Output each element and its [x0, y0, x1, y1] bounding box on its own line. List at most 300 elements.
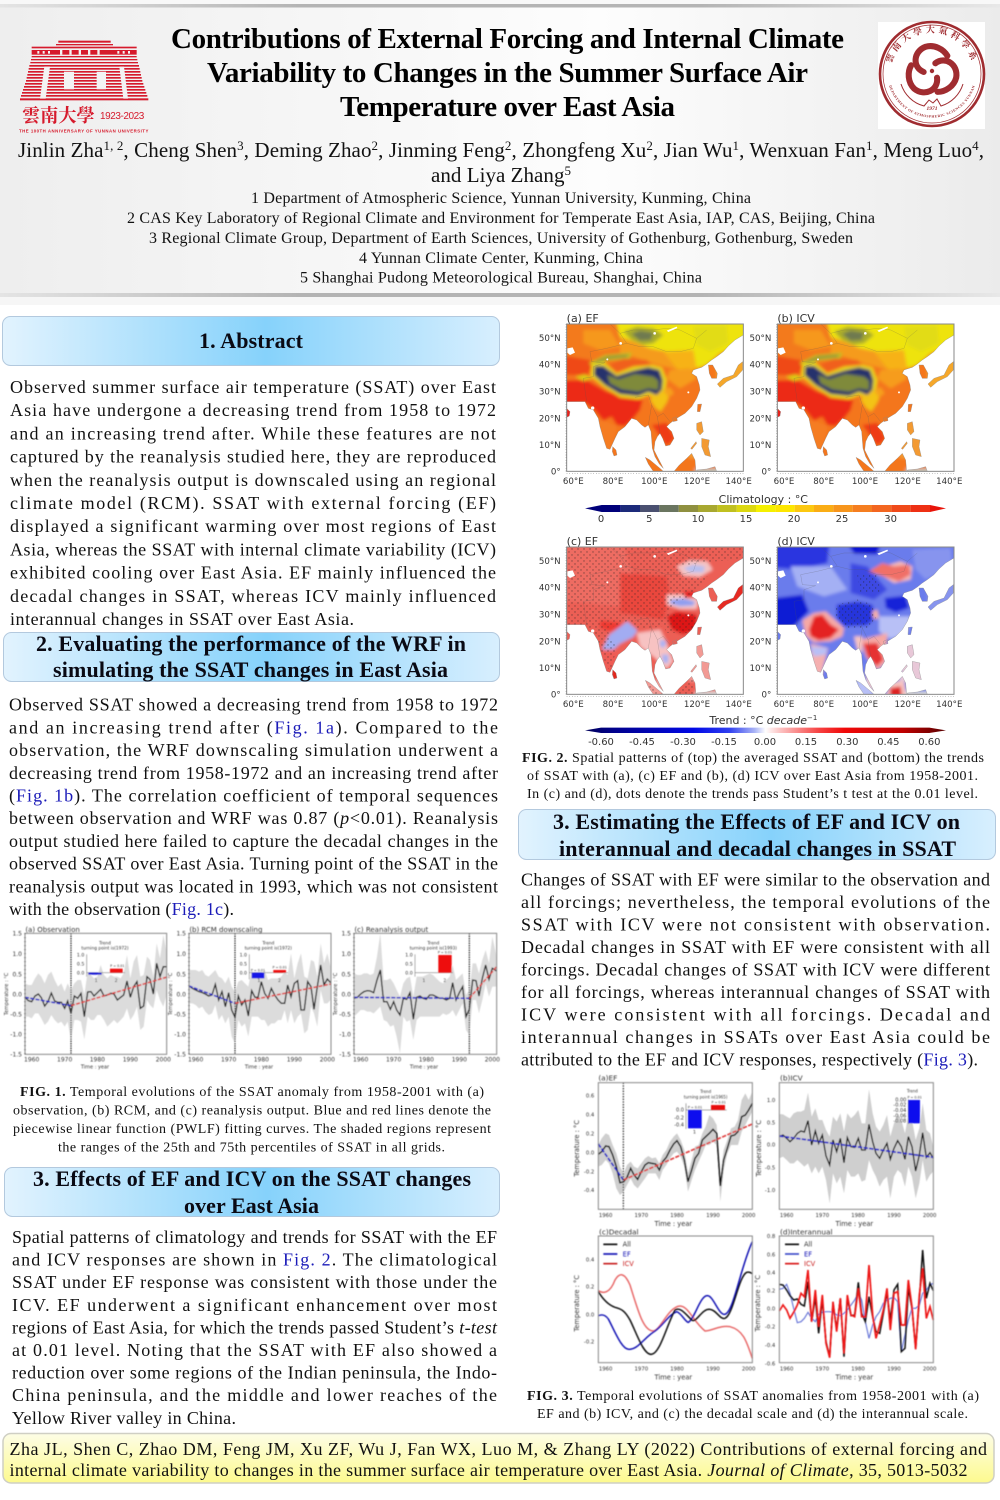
chart: panel (b) RCM downscaling: 2000 — [320, 1057, 335, 1064]
logo: Department of Atmospheric Sciences seal: 雲南大學大氣科學系 — [886, 24, 978, 62]
abstract text: captured by the reanalysis studied here, they are reproduced — [10, 447, 496, 467]
logo: Yunnan University centenary: 1923-2023 — [100, 111, 145, 122]
section 3 right text: SSAT with ICV were not consistent with observation. — [521, 915, 990, 935]
panel: section 3 heading (right): interannual and decadal changes in SSAT — [559, 836, 956, 861]
chart: panel (c) Reanalysis output: Time : year — [409, 1065, 439, 1071]
figure 3 caption — [527, 1389, 979, 1422]
legend: interannual: All — [804, 1241, 812, 1249]
header background — [0, 0, 1000, 305]
section 3 left text: reduction over some regions of the Indian peninsula, the Indo- — [12, 1363, 497, 1383]
inset: trend bars EF: P = 0.01 — [712, 1100, 726, 1104]
logo: Yunnan University centenary — [19, 41, 148, 134]
affiliations: 1 Department of Atmospheric Science, Yunnan University, Kunming, China — [251, 190, 751, 207]
affiliations: 5 Shanghai Pudong Meteorological Bureau, Shanghai, China — [300, 270, 702, 286]
chart: panel (b) RCM downscaling: 1980 — [254, 1057, 269, 1064]
section 3 right text: all forcings; nevertheless, the temporal evolutions of the — [521, 892, 990, 912]
chart: panel (a) EF: 0.6 — [586, 1093, 595, 1099]
colorbar: trend: 0.00 — [754, 737, 776, 748]
authors: 2 — [505, 138, 511, 153]
inset: trend bars (c): P = 0.01 — [438, 951, 452, 955]
panel: section 2 heading: 2. Evaluating the performance of the WRF in — [36, 631, 466, 656]
figure 1 caption: observation, (b) RCM, and (c) reanalysis output. Blue and red lines denote the — [13, 1104, 491, 1118]
colorbar: climatology: 30 — [884, 514, 897, 525]
abstract text: Asia, whereas the SSAT with internal climate variability (ICV) — [10, 539, 496, 560]
chart: panel (d) Interannual: 0.2 — [767, 1289, 775, 1295]
map: (a) EF climatology: (a) EF — [567, 312, 599, 325]
chart: panel (a) EF: 0.0 — [586, 1151, 595, 1157]
inset: trend bars (a): turning point is(1972) — [81, 946, 129, 952]
figure 2: climatology maps — [539, 310, 971, 525]
chart: panel (a) EF: 0.4 — [586, 1113, 595, 1119]
chart: panel (d) Interannual: Time : year — [835, 1374, 873, 1382]
colorbar: trend — [585, 714, 946, 748]
chart: panel (b) RCM downscaling: (b) RCM downscaling — [189, 926, 262, 934]
chart: panel (d) Interannual: 0.6 — [767, 1252, 776, 1258]
chart: panel (c) Decadal: 0.0 — [586, 1312, 595, 1318]
chart: panel (a) EF: 2000 — [742, 1213, 756, 1219]
chart: panel (a) EF: 1970 — [635, 1213, 649, 1219]
inset: trend bars (a) — [77, 940, 129, 984]
chart: panel (b) RCM downscaling: -1.5 — [174, 1052, 186, 1059]
colorbar: trend: 0.45 — [877, 737, 899, 748]
logo: Yunnan University centenary: 雲南大學 — [22, 102, 95, 128]
colorbar: trend: −1 — [807, 714, 817, 722]
figure 1: three time series panels — [4, 926, 500, 1071]
inset: trend bars (b): Trend — [261, 940, 274, 946]
chart: panel (c) Decadal: 0.2 — [586, 1285, 594, 1291]
affiliations: 4 Yunnan Climate Center, Kunming, China — [359, 250, 643, 267]
chart: panel (a) EF: 1990 — [706, 1213, 720, 1219]
section 3 left text: at 0.01 level. Noting that the SSAT with EF also showed a — [12, 1340, 497, 1360]
section 3 left text — [12, 1227, 498, 1428]
chart: panel (a) EF: 0.2 — [586, 1131, 594, 1137]
section 3 right text: forcings. Decadal changes of SSAT with ICV were different — [521, 960, 990, 980]
chart: panel (a) EF: 1980 — [670, 1213, 684, 1219]
chart: panel (d) Interannual: 0.4 — [767, 1271, 776, 1277]
colorbar: trend: -0.30 — [670, 737, 696, 748]
inset: trend bars (b): P = 0.01 — [251, 968, 265, 972]
chart: panel (c) Reanalysis output: 2000 — [485, 1057, 500, 1064]
section 3 right text: for all forcings, whereas interannual changes of SSAT with — [521, 982, 990, 1002]
panel: section 1 heading: 1. Abstract — [199, 328, 304, 353]
chart: panel (a) Observation: 1.5 — [12, 931, 22, 938]
figure 3: bottom row decadal and interannual — [573, 1227, 937, 1382]
chart: panel (d) Interannual: 2000 — [923, 1366, 937, 1372]
chart: panel (a) EF: 1960 — [599, 1213, 613, 1219]
chart: panel (c) Decadal: Temperature : °C — [573, 1275, 581, 1333]
figure 1 caption — [13, 1085, 491, 1156]
section 2 text: Observed SSAT showed a decreasing trend from 1958 to 1972 — [9, 695, 498, 715]
section 2 text: and an increasing trend after (Fig. 1a). Compared to the — [9, 717, 498, 738]
chart: panel (b) ICV: 1980 — [851, 1213, 865, 1219]
panel: section 1 heading — [2, 316, 500, 366]
chart: panel (b) RCM downscaling: 1990 — [287, 1057, 302, 1064]
title: Temperature over East Asia — [340, 91, 676, 123]
map: (c) EF trend: (c) EF — [567, 535, 598, 548]
section 3 left text: ICV. EF underwent a significant enhancement over most — [12, 1295, 497, 1315]
chart: panel (c) Decadal: Time : year — [654, 1374, 692, 1382]
inset: trend bars (b): turning point is(1972) — [245, 946, 292, 952]
inset: trend bars EF: Trend — [699, 1089, 712, 1094]
colorbar: climatology: 20 — [788, 514, 800, 525]
inset: trend bar ICV — [893, 1088, 922, 1125]
chart: panel (c) Reanalysis output: 1.0 — [341, 951, 351, 958]
colorbar: trend: -0.60 — [588, 737, 614, 748]
chart: panel (d) Interannual: (d)Interannual — [780, 1227, 833, 1236]
legend: decadal: EF — [623, 1250, 631, 1258]
chart: panel (a) Observation: 1990 — [123, 1057, 138, 1064]
chart: panel (b) ICV — [755, 1074, 937, 1228]
section 2 text: observation, the WRF downscaling simulation underwent a — [9, 740, 498, 760]
logo: Department of Atmospheric Sciences seal: DEPARTMENT OF ATMOSPHERIC SCIENCES YUNNAN — [889, 85, 975, 118]
inset: trend bars EF: 1 — [693, 1130, 696, 1136]
chart: panel (b) RCM downscaling: Time : year — [244, 1065, 274, 1071]
chart: panel (c) Reanalysis output: 1960 — [353, 1057, 368, 1064]
chart: panel (c) Reanalysis output: 0.0 — [341, 991, 351, 998]
chart: panel (c) Decadal: -0.2 — [584, 1340, 594, 1346]
colorbar: climatology: 5 — [646, 514, 653, 525]
inset: trend bar ICV: Trend — [906, 1088, 918, 1093]
title: Contributions of External Forcing and Internal Climate — [171, 23, 844, 55]
title: Variability to Changes in the Summer Surface Air — [207, 57, 808, 89]
chart: panel (b) ICV: 2000 — [923, 1213, 937, 1219]
chart: panel (c) Decadal: 1990 — [706, 1366, 720, 1372]
chart: panel (c) Reanalysis output: 0.5 — [341, 971, 351, 978]
chart: panel (c) Decadal: 1960 — [599, 1366, 613, 1372]
figure 1 caption: FIG. 1. Temporal evolutions of the SSAT anomaly from 1958-2001 with (a) — [20, 1085, 484, 1100]
chart: panel (c) Decadal: 0.4 — [586, 1257, 595, 1263]
chart: panel (d) Interannual: -0.2 — [765, 1325, 775, 1331]
figure 2: trend maps — [539, 533, 971, 748]
inset: trend bars EF: turning point is(1965) — [684, 1095, 728, 1100]
authors: 4 — [972, 138, 979, 153]
chart: panel (b) RCM downscaling — [168, 926, 335, 1071]
abstract text: displayed a significant warming over most regions of East — [10, 516, 496, 536]
authors: 2 — [646, 138, 653, 153]
inset: trend bars (b): 2 — [278, 978, 281, 984]
chart: panel (a) Observation: 0.0 — [12, 991, 22, 998]
section 2 text: output studied here failed to capture the decadal changes in the — [9, 831, 498, 851]
chart: panel (b) RCM downscaling: 1.0 — [176, 951, 186, 958]
chart: panel (b) ICV: Time : year — [835, 1220, 873, 1228]
chart: panel (b) ICV: 1990 — [887, 1213, 901, 1219]
inset: trend bars (b): P = 0.01 — [272, 966, 287, 970]
chart: panel (d) Interannual — [754, 1227, 937, 1382]
chart: panel (b) ICV: (b)ICV — [780, 1074, 803, 1083]
authors: , Jian Wu — [653, 138, 733, 162]
section 3 right text — [521, 870, 990, 1071]
figure 2 caption: FIG. 2. Spatial patterns of (top) the averaged SSAT and (bottom) the trends — [522, 751, 984, 766]
legend: interannual: ICV — [804, 1260, 816, 1268]
colorbar: trend: -0.15 — [711, 737, 737, 748]
figure 2 caption: of SSAT with (a), (c) EF and (b), (d) ICV over East Asia from 1958-2001. — [527, 769, 978, 784]
chart: panel (a) Observation: Temperature : °C — [4, 972, 10, 1016]
colorbar: climatology: Climatology : °C — [719, 493, 808, 506]
inset: trend bars (b): 1.0 — [240, 953, 247, 959]
chart: panel (c) Reanalysis output: 1970 — [386, 1057, 401, 1064]
section 3 left text: SSAT under EF response was consistent with those under the — [12, 1272, 497, 1292]
authors: , Cheng Shen — [123, 138, 238, 162]
inset: trend bar ICV: P = 0.01 — [907, 1095, 922, 1099]
chart: panel (d) Interannual: 1980 — [851, 1366, 865, 1372]
inset: trend bars (a): Trend — [98, 940, 111, 946]
inset: trend bar ICV: -0.04 — [893, 1108, 906, 1114]
chart: panel (a) EF: -0.2 — [584, 1170, 594, 1176]
section 3 left text: China peninsula, and the middle and lower reaches of the — [12, 1385, 497, 1405]
chart: panel (d) Interannual: 1990 — [887, 1366, 901, 1372]
authors: 1, 2 — [104, 138, 123, 153]
colorbar: trend: 0.60 — [918, 737, 940, 748]
inset: trend bars (c): 1 — [422, 978, 425, 984]
inset: trend bar ICV: 0.00 — [895, 1097, 906, 1103]
chart: panel (c) Reanalysis output: (c) Reanalysis output — [354, 926, 428, 934]
logo: Department of Atmospheric Sciences seal — [878, 20, 986, 129]
map: (d) ICV trend — [750, 533, 971, 710]
section 3 left text: Spatial patterns of climatology and trends for SSAT with the EF — [12, 1227, 497, 1247]
authors: , Wenxuan Fan — [739, 138, 866, 162]
inset: trend bars (b): 0.0 — [240, 970, 247, 976]
inset: trend bars EF: -0.4 — [674, 1123, 684, 1129]
chart: panel (b) RCM downscaling: Temperature : °C — [168, 972, 174, 1016]
chart: panel (a) EF: Time : year — [654, 1220, 692, 1228]
panel: section 2 heading: simulating the SSAT changes in East Asia — [53, 657, 448, 682]
legend: decadal — [603, 1241, 634, 1268]
panel: section 3 heading (right) — [518, 809, 996, 861]
chart: panel (b) RCM downscaling: 0.5 — [176, 971, 186, 978]
chart: panel (d) Interannual: -0.4 — [765, 1343, 776, 1349]
legend: interannual — [785, 1241, 816, 1268]
authors: 1 — [866, 138, 873, 153]
chart: panel (a) Observation: 1.0 — [12, 951, 22, 958]
chart: panel (a) Observation: -0.5 — [10, 1011, 22, 1018]
logo: Yunnan University centenary: THE 100TH ANNIVERSARY OF YUNNAN UNIVERSITY — [19, 129, 148, 134]
authors: 3 — [237, 138, 244, 153]
figure 3: top row time series — [573, 1074, 937, 1228]
inset: trend bar ICV: -0.06 — [893, 1113, 906, 1119]
chart: panel (c) Reanalysis output: -1.5 — [339, 1052, 351, 1059]
chart: panel (c) Decadal: 1980 — [670, 1366, 684, 1372]
chart: panel (c) Decadal — [573, 1227, 756, 1382]
colorbar: climatology: 25 — [836, 514, 848, 525]
panel: section 3 heading (left) — [4, 1166, 500, 1218]
legend: interannual: EF — [804, 1250, 812, 1258]
chart: panel (a) EF: Temperature : °C — [573, 1120, 581, 1178]
chart: panel (a) Observation: (a) Observation — [25, 926, 80, 934]
section 3 right text: Decadal changes in SSAT with EF were consistent with all — [521, 937, 990, 957]
chart: panel (b) ICV: -1.0 — [765, 1188, 776, 1194]
affiliations: 2 CAS Key Laboratory of Regional Climate and Environment for Temperate East Asia, IAP, CAS, Beijing, China — [127, 210, 875, 227]
chart: panel (a) Observation: 0.5 — [12, 971, 22, 978]
section 3 right text: Changes of SSAT with EF were similar to the observation and — [521, 870, 990, 890]
inset: trend bars (a): P = 0.01 — [110, 964, 124, 968]
section 3 left text: Yellow River valley in China. — [12, 1408, 236, 1428]
authors: , — [979, 138, 984, 162]
abstract text: exhibited cooling over East Asia. EF mainly influenced the — [10, 563, 496, 583]
panel: section 3 heading (right): 3. Estimating the Effects of EF and ICV on — [553, 809, 960, 834]
inset: trend bars (c): 2 — [443, 978, 446, 984]
inset: trend bars (c): Trend — [426, 940, 439, 946]
chart: panel (c) Reanalysis output — [333, 926, 500, 1071]
title — [171, 23, 844, 123]
chart: panel (b) ICV: 1960 — [780, 1213, 794, 1219]
authors: , Zhongfeng Xu — [512, 138, 647, 162]
abstract text: climate model (RCM). SSAT with external forcing (EF) — [10, 493, 496, 514]
chart: panel (b) ICV: 0.0 — [767, 1143, 776, 1149]
legend: decadal: All — [623, 1241, 631, 1249]
section 3 right text: interannual changes in SSATs over East Asia could be — [521, 1027, 990, 1047]
chart: panel (c) Reanalysis output: -1.0 — [339, 1032, 351, 1039]
inset: trend bars EF: -0.2 — [674, 1115, 684, 1121]
section 2 text: decreasing trend from 1958-1972 and an increasing trend after — [9, 763, 498, 783]
logo: Department of Atmospheric Sciences seal: 1971 — [926, 106, 938, 112]
map: (b) ICV climatology: (b) ICV — [777, 312, 815, 325]
section 2 text: (Fig. 1b). The correlation coefficient of temporal sequences — [9, 786, 498, 806]
colorbar: trend: 0.30 — [836, 737, 858, 748]
inset: trend bars (c): 1.0 — [405, 953, 413, 959]
authors: 2 — [372, 138, 378, 153]
authors: 1 — [733, 138, 739, 153]
inset: trend bars (a): 0.5 — [77, 962, 84, 968]
chart: panel (c) Decadal: (c)Decadal — [599, 1227, 639, 1236]
inset: trend bars EF — [674, 1089, 728, 1136]
citation box — [3, 1434, 994, 1483]
inset: trend bars EF: P = 0.01 — [688, 1106, 702, 1110]
colorbar: climatology — [585, 493, 946, 525]
chart: panel (b) RCM downscaling: -0.5 — [174, 1011, 186, 1018]
chart: panel (b) ICV: -0.5 — [765, 1165, 775, 1171]
inset: trend bars (a): 1.0 — [77, 953, 84, 959]
section 2 text: with the observation (Fig. 1c). — [9, 899, 234, 920]
inset: trend bar ICV: -0.02 — [893, 1103, 906, 1109]
chart: panel (a) EF: (a)EF — [598, 1074, 617, 1083]
abstract text: and an increasing trend after. While these features are not — [10, 423, 496, 443]
section 3 left text: and ICV responses are shown in Fig. 2. The climatological — [12, 1250, 497, 1270]
colorbar: climatology: 0 — [598, 514, 604, 525]
chart: panel (b) RCM downscaling: 0.0 — [176, 991, 186, 998]
map: (a) EF climatology — [539, 310, 760, 487]
section 3 left text: regions of East Asia, for which the trends passed Student’s t-test — [12, 1317, 498, 1337]
section 3 right text: attributed to the EF and ICV responses, respectively (Fig. 3). — [521, 1050, 978, 1071]
inset: trend bars (c): turning point is(1993) — [410, 946, 457, 952]
section 2 text: reanalysis output was located in 1993, which was not consistent — [9, 876, 498, 896]
chart: panel (a) Observation: -1.0 — [10, 1032, 22, 1039]
inset: trend bars (a): 2 — [115, 978, 118, 984]
citation box: Zha JL, Shen C, Zhao DM, Feng JM, Xu ZF, Wu J, Fan WX, Luo M, & Zhang LY (2022) Contributions of external forcing and — [10, 1439, 987, 1460]
chart: panel (c) Decadal: 2000 — [742, 1366, 756, 1372]
chart: panel (a) EF — [573, 1074, 756, 1228]
panel: section 3 heading (left): 3. Effects of EF and ICV on the SSAT changes — [33, 1166, 471, 1191]
citation box: internal climate variability to changes in the summer surface air temperature over East Asia. Journal of Climate, 35, 5013-5032 — [10, 1460, 968, 1480]
legend: decadal: ICV — [623, 1260, 634, 1268]
authors: , Jinming Feng — [378, 138, 505, 162]
abstract text: Asia have undergone a decreasing trend from 1958 to 1972 — [10, 400, 496, 420]
figure 2 caption: In (c) and (d), dots denote the trends pass Student’s t test at the 0.01 level. — [527, 787, 978, 802]
chart: panel (b) RCM downscaling: 1960 — [188, 1057, 203, 1064]
chart: panel (a) EF: -0.4 — [584, 1188, 595, 1194]
inset: trend bars (c): 0.5 — [405, 962, 413, 968]
figure 3 caption: EF and (b) ICV, and (c) the decadal scale and (d) the interannual scale. — [537, 1407, 968, 1422]
section 2 text — [9, 695, 498, 920]
chart: panel (a) Observation: 1970 — [57, 1057, 72, 1064]
figure 1 caption: piecewise linear function (PWLF) fitting curves. The shaded regions represent — [13, 1122, 491, 1137]
authors: , Deming Zhao — [244, 138, 371, 162]
abstract text: interannual changes in SSAT over East Asia. — [10, 609, 354, 629]
chart: panel (b) ICV: 1970 — [816, 1213, 830, 1219]
chart: panel (c) Reanalysis output: Temperature : °C — [333, 972, 339, 1016]
chart: panel (c) Reanalysis output: 1980 — [419, 1057, 434, 1064]
affiliations: 3 Regional Climate Group, Department of Earth Sciences, University of Gothenburg, Gothenburg, Sweden — [149, 230, 853, 247]
authors — [18, 138, 984, 187]
chart: panel (d) Interannual: 1960 — [780, 1366, 794, 1372]
authors: and Liya Zhang — [431, 163, 564, 187]
chart: panel (b) RCM downscaling: 1.5 — [176, 931, 186, 938]
colorbar: climatology: 15 — [740, 514, 752, 525]
figure 2 caption — [522, 751, 984, 802]
panel: section 2 heading — [4, 631, 500, 682]
affiliations — [127, 190, 875, 286]
colorbar: trend: -0.45 — [629, 737, 655, 748]
figure 3 caption: FIG. 3. Temporal evolutions of SSAT anomalies from 1958-2001 with (a) — [527, 1389, 979, 1404]
inset: trend bar ICV: -0.08 — [893, 1119, 906, 1125]
chart: panel (b) ICV: Temperature : °C — [755, 1120, 763, 1178]
chart: panel (d) Interannual: -0.6 — [765, 1361, 776, 1367]
inset: trend bars (c) — [405, 940, 457, 984]
map: (c) EF trend — [539, 533, 760, 710]
abstract text — [10, 377, 496, 629]
chart: panel (a) Observation: -1.5 — [10, 1052, 22, 1059]
section 3 right text: ICV were consistent with all forcings. Decadal and — [521, 1005, 990, 1025]
chart: panel (a) Observation: 2000 — [156, 1057, 171, 1064]
chart: panel (a) Observation: Time : year — [80, 1065, 110, 1071]
abstract text: when the reanalysis output is downscaled using an regional — [10, 470, 496, 490]
colorbar: trend: 0.15 — [795, 737, 817, 748]
inset: trend bars (b) — [240, 940, 292, 984]
chart: panel (c) Reanalysis output: 1990 — [452, 1057, 467, 1064]
chart: panel (a) Observation — [4, 926, 171, 1071]
inset: trend bars EF: 0.0 — [676, 1108, 684, 1114]
figure 1 caption: the ranges of the 25th and 75th percentiles of SSAT in all grids. — [58, 1140, 445, 1156]
map: (b) ICV climatology — [750, 310, 971, 487]
abstract text: Observed summer surface air temperature (SSAT) over East — [10, 377, 496, 398]
authors: Jinlin Zha — [18, 138, 103, 162]
chart: panel (a) Observation: 1980 — [90, 1057, 105, 1064]
chart: panel (b) RCM downscaling: 1970 — [221, 1057, 236, 1064]
authors: , Meng Luo — [873, 138, 972, 162]
map: (d) ICV trend: (d) ICV — [777, 535, 815, 548]
section 2 text: between observation and WRF was 0.87 (p<0.01). Reanalysis — [9, 808, 498, 829]
chart: panel (d) Interannual: 1970 — [816, 1366, 830, 1372]
colorbar: trend: Trend : °C decade — [709, 714, 807, 727]
chart: panel (d) Interannual: 0.0 — [767, 1307, 776, 1313]
chart: panel (c) Reanalysis output: 1.5 — [341, 931, 351, 938]
chart: panel (d) Interannual: 0.8 — [767, 1234, 776, 1240]
colorbar: climatology: 10 — [692, 514, 704, 525]
chart: panel (d) Interannual: Temperature : °C — [754, 1275, 762, 1333]
chart: panel (c) Reanalysis output: -0.5 — [339, 1011, 351, 1018]
authors: 5 — [564, 163, 571, 178]
panel: section 3 heading (left): over East Asia — [184, 1193, 319, 1218]
chart: panel (b) ICV: 0.5 — [767, 1120, 775, 1126]
chart: panel (a) Observation: 1960 — [24, 1057, 39, 1064]
inset: trend bars (a): 1 — [95, 978, 98, 984]
chart: panel (b) ICV: 1.0 — [767, 1098, 776, 1104]
inset: trend bars (a): 0.0 — [77, 970, 84, 976]
chart: panel (b) RCM downscaling: -1.0 — [174, 1032, 186, 1039]
chart: panel (c) Decadal: 1970 — [635, 1366, 649, 1372]
inset: trend bars (c): 0.0 — [405, 970, 413, 976]
abstract text: decadal changes in SSAT, whereas ICV mainly influenced — [10, 586, 496, 606]
inset: trend bars (b): 1 — [257, 978, 260, 984]
